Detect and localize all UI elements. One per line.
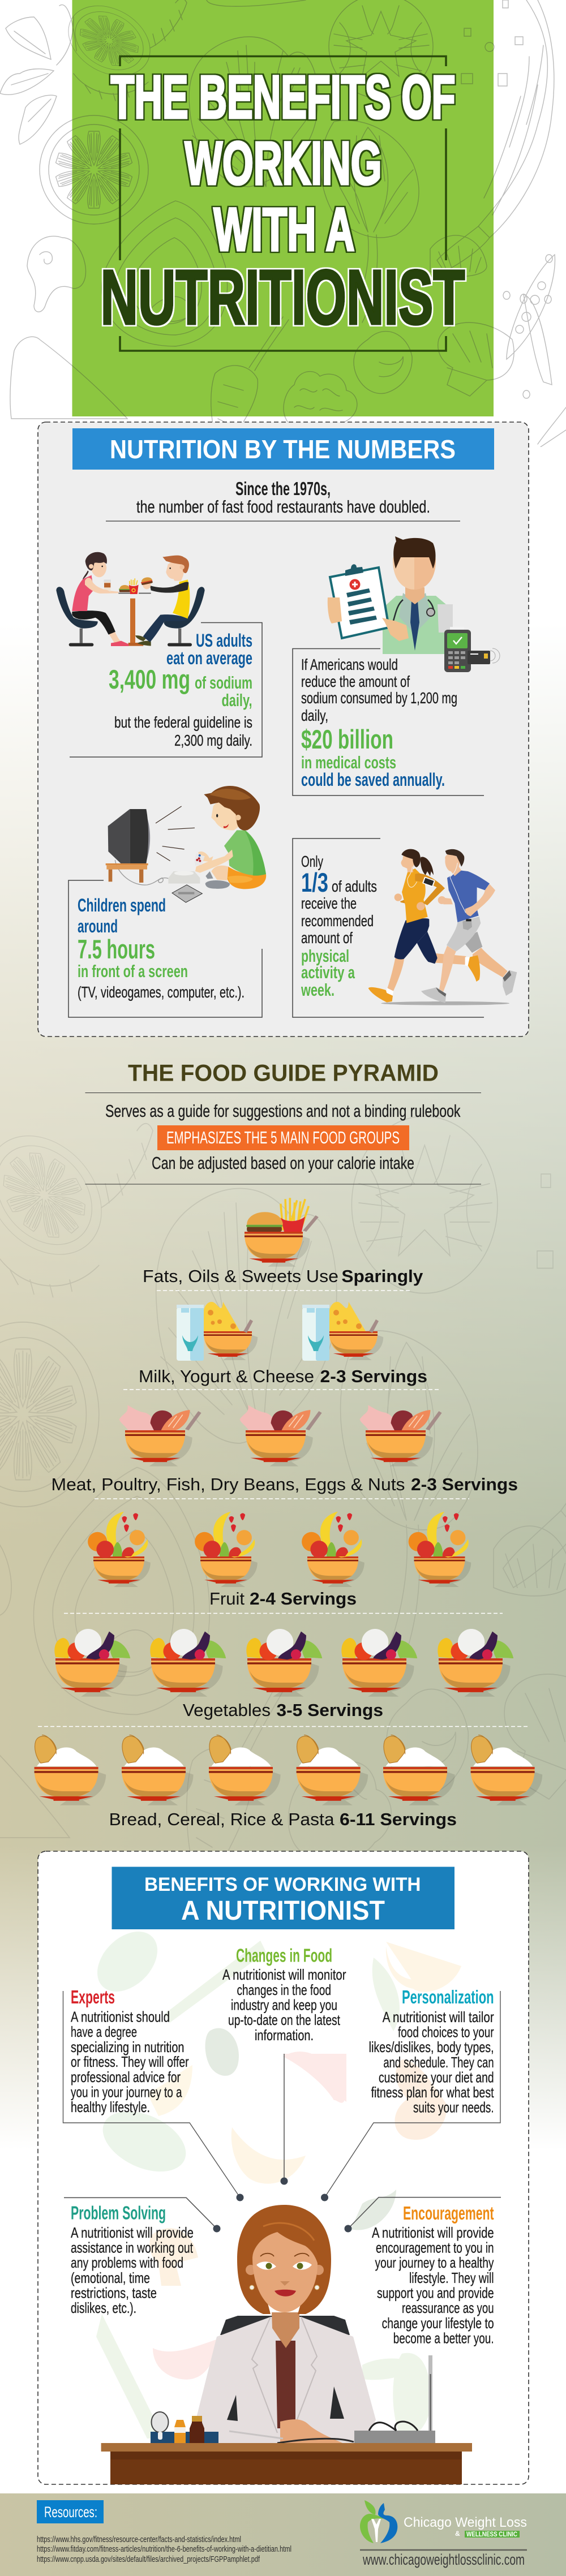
tier: milk, yogurt and cheese: [123, 1302, 440, 1390]
stat box: sodium intake: 3,400 mg: [109, 664, 190, 694]
benefit: problem solving: restrictions, taste: [71, 2285, 157, 2302]
stat box: physical activity: receive the: [301, 894, 357, 912]
section: the food guide pyramid: [35, 1059, 542, 1829]
benefit: experts: have a degree: [71, 2023, 137, 2040]
tier: meat, poultry, fish: [51, 1405, 518, 1499]
stat box: sodium intake: of sodium: [195, 673, 252, 693]
stat box: screen time: around: [78, 916, 118, 936]
benefit: personalization: likes/dislikes, body types,: [369, 2039, 494, 2055]
resources label: Resources:: [44, 2504, 97, 2521]
fast food intro: the number of fast food restaurants have doubled.: [136, 497, 430, 517]
benefit: personalization: A nutritionist will tailor: [383, 2009, 494, 2025]
resources label: [37, 2500, 104, 2523]
benefit: problem solving: Problem Solving: [71, 2203, 166, 2224]
stat box: screen time: 7.5 hours: [78, 934, 155, 964]
illustration: boy playing video games: [106, 786, 266, 902]
stat box: physical activity: recommended: [301, 912, 374, 930]
logo: [360, 2500, 527, 2568]
tier: fruit: Fruit: [209, 1589, 245, 1609]
illustration: couple jogging: [368, 849, 517, 1005]
benefit: personalization: customize your diet and: [379, 2068, 494, 2085]
benefit: personalization: [321, 1986, 500, 2201]
benefit: experts: or fitness. They will offer: [71, 2053, 189, 2070]
tier: fruit: [64, 1512, 503, 1614]
tier: fruit: 2-4 Servings: [250, 1589, 357, 1609]
illustration: couple eating fast food: [56, 552, 205, 646]
logo: &: [455, 2530, 460, 2538]
stat box: physical activity: amount of: [301, 929, 353, 947]
benefit: encouragement: support you and provide: [377, 2285, 494, 2302]
tier: vegetables: [38, 1629, 529, 1727]
fast food intro: [106, 478, 460, 521]
tier: fats, oils and sweets: Fats, Oils & Sweets Use: [143, 1266, 338, 1286]
benefit: problem solving: A nutritionist will provide: [71, 2224, 194, 2241]
stat box: sodium intake: [70, 622, 262, 757]
resource links: https://www.hhs.gov/fitness/resource-center/facts-and-statistics/index.html: [37, 2535, 241, 2544]
fast food intro: Since the 1970s,: [235, 478, 331, 499]
stat box: physical activity: Only: [301, 853, 323, 870]
benefit: changes in food: information.: [255, 2027, 314, 2044]
title frame: [120, 57, 446, 351]
tier: vegetables: Vegetables: [183, 1700, 271, 1720]
stat box: screen time: [68, 880, 262, 1017]
tier: meat, poultry, fish: Meat, Poultry, Fish, Dry Beans, Eggs & Nuts: [51, 1474, 405, 1494]
panel: benefits of working with a nutritionist: [38, 1851, 529, 2484]
stat box: screen time: Children spend: [78, 895, 166, 915]
vegetable line art: [0, 0, 566, 453]
tier: bread, cereal, rice, pasta: Bread, Cereal, Rice & Pasta: [109, 1809, 335, 1829]
tier: fats, oils and sweets: [143, 1198, 423, 1291]
stat box: sodium intake: daily,: [222, 690, 252, 710]
hero banner: [0, 0, 566, 453]
stat box: screen time: (TV, videogames, computer, etc.).: [78, 983, 245, 1001]
stat box: sodium savings: sodium consumed by 1,200 mg: [301, 689, 457, 707]
pyramid notes: Can be adjusted based on your calorie intake: [152, 1153, 414, 1173]
benefit: experts: you in your journey to a: [71, 2084, 182, 2101]
benefit: personalization: suits your needs.: [413, 2099, 494, 2116]
benefit: experts: healthy lifestyle.: [71, 2098, 150, 2115]
stat box: sodium intake: 2,300 mg daily.: [174, 732, 252, 749]
stat box: sodium savings: reduce the amount of: [301, 673, 410, 690]
pyramid background line art: [0, 1112, 566, 1895]
section banner: [72, 428, 494, 470]
benefit: problem solving: [64, 2197, 221, 2316]
section banner: NUTRITION BY THE NUMBERS: [110, 435, 456, 464]
tier: milk, yogurt and cheese: Milk, Yogurt & Cheese: [139, 1366, 314, 1386]
illustration: nutritionist at desk: [101, 2205, 472, 2484]
logo: WELLNESS CLINIC: [466, 2531, 517, 2538]
benefit: problem solving: assistance in working out: [71, 2239, 194, 2256]
benefit: experts: A nutritionist should: [71, 2008, 170, 2025]
green panel: [72, 0, 494, 416]
benefit: experts: [63, 1986, 243, 2201]
tier: vegetables: 3-5 Servings: [276, 1700, 383, 1720]
benefit: encouragement: your journey to a healthy: [375, 2254, 494, 2271]
stat box: physical activity: activity a: [301, 962, 355, 982]
benefit: changes in food: up-to-date on the latest: [228, 2011, 341, 2028]
tier: bread, cereal, rice, pasta: 6-11 Servings: [340, 1809, 457, 1829]
stat box: sodium savings: [293, 648, 484, 795]
illustration: doctor with clipboard and card terminal: [328, 536, 500, 672]
title: [101, 62, 465, 341]
benefit: changes in food: A nutritionist will monitor: [222, 1966, 346, 1983]
benefit: changes in food: changes in the food: [237, 1981, 331, 1998]
benefit: encouragement: encouragement to you in: [376, 2239, 494, 2256]
benefit: changes in food: industry and keep you: [231, 1996, 337, 2013]
pyramid notes: [85, 1093, 481, 1184]
benefit: encouragement: lifestyle. They will: [409, 2269, 494, 2286]
benefit: encouragement: Encouragement: [403, 2203, 494, 2224]
tier: fats, oils and sweets: Sparingly: [341, 1266, 423, 1286]
stat box: physical activity: of adults: [332, 878, 377, 895]
banner: A NUTRITIONIST: [181, 1896, 385, 1926]
pyramid heading: THE FOOD GUIDE PYRAMID: [128, 1059, 439, 1086]
stat box: sodium intake: US adults: [196, 630, 252, 651]
benefit: personalization: fitness plan for what best: [371, 2084, 494, 2101]
stat box: sodium intake: but the federal guideline is: [114, 713, 252, 731]
benefit: encouragement: become a better you.: [393, 2330, 494, 2347]
stat box: physical activity: [293, 838, 484, 1017]
benefit: problem solving: any problems with food: [71, 2254, 183, 2271]
benefit: encouragement: change your lifestyle to: [382, 2315, 494, 2332]
footer: [0, 2493, 566, 2576]
stat box: physical activity: week.: [301, 980, 335, 1000]
benefit: experts: professional advice for: [71, 2068, 181, 2085]
tier: meat, poultry, fish: 2-3 Servings: [411, 1474, 518, 1494]
resource links: [37, 2535, 291, 2564]
benefit: personalization: and schedule. They can: [383, 2054, 494, 2071]
banner: [112, 1867, 454, 1929]
title: WORKING: [185, 129, 381, 197]
benefit: changes in food: [222, 1945, 346, 2185]
stat box: sodium savings: If Americans would: [301, 656, 398, 673]
stat box: sodium savings: $20 billion: [301, 724, 393, 754]
faint vegetable watermark: [85, 1920, 461, 2439]
benefit: experts: Experts: [71, 1986, 115, 2007]
banner: BENEFITS OF WORKING WITH: [144, 1874, 421, 1895]
tier: bread, cereal, rice, pasta: [35, 1735, 542, 1829]
stat box: sodium intake: eat on average: [166, 648, 252, 668]
stat box: screen time: in front of a screen: [78, 961, 188, 981]
resource links: https://www.cnpp.usda.gov/sites/default/files/archived_projects/FGPPamphlet.pdf: [37, 2555, 260, 2564]
stat box: physical activity: 1/3: [301, 867, 328, 897]
stat box: sodium savings: in medical costs: [301, 752, 396, 772]
title: WITH A: [214, 195, 354, 264]
resource links: https://www.fitday.com/fitness-articles/nutrition/the-6-benefits-of-working-with-a-dietitian.html: [37, 2544, 291, 2554]
benefit: changes in food: Changes in Food: [236, 1945, 332, 1966]
tier: milk, yogurt and cheese: 2-3 Servings: [320, 1366, 427, 1386]
stat box: physical activity: physical: [301, 946, 349, 966]
pyramid notes: EMPHASIZES THE 5 MAIN FOOD GROUPS: [166, 1128, 400, 1147]
benefit: encouragement: [344, 2197, 501, 2347]
panel: nutrition by the numbers: [38, 422, 529, 1037]
benefit: problem solving: dislikes, etc.).: [71, 2299, 136, 2316]
benefit: problem solving: (emotional, time: [71, 2269, 150, 2286]
stat box: sodium savings: daily,: [301, 707, 328, 724]
benefit: encouragement: reassurance as you: [402, 2299, 494, 2316]
stat box: sodium savings: could be saved annually.: [301, 769, 445, 790]
benefit: experts: specializing in nutrition: [71, 2039, 185, 2055]
benefit: personalization: Personalization: [402, 1986, 494, 2007]
benefit: personalization: food choices to your: [398, 2024, 494, 2041]
logo: Chicago Weight Loss: [404, 2515, 527, 2530]
benefit: encouragement: A nutritionist will provide: [372, 2224, 494, 2241]
